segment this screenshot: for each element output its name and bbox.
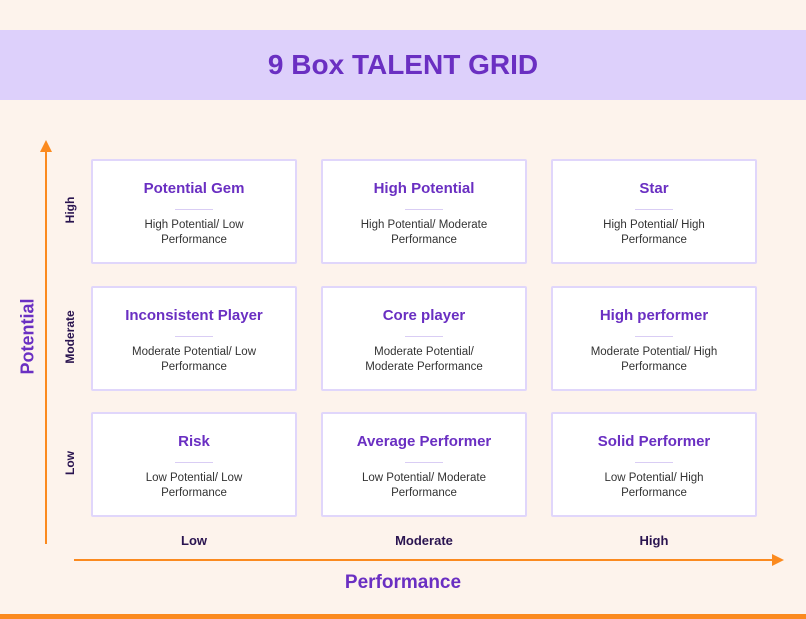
box: high performer: High performer [600,307,708,324]
box: high performer: Moderate Potential/ High Performance [591,346,717,373]
x label high: High [640,533,668,548]
box: potential gem: Potential Gem [144,180,244,197]
box: solid performer [551,412,757,517]
axis title: potential: Potential [18,298,38,375]
box: average performer: Low Potential/ Moderate Performance [362,472,486,499]
box: star [551,159,757,264]
y label moderate: Moderate [63,310,77,364]
box: star: High Potential/ High Performance [603,219,705,246]
box: average performer: Average Performer [357,433,491,450]
box: solid performer: Low Potential/ High Performance [604,472,704,499]
box: inconsistent player [91,286,297,391]
box: risk: Risk [178,433,210,450]
title: 9 Box TALENT GRID [268,49,538,80]
box: star: Star [639,180,669,197]
box: high performer [551,286,757,391]
box: potential gem: High Potential/ Low Performance [144,219,244,246]
arrow: potential axis [40,140,52,544]
box: inconsistent player: Moderate Potential/ Low Performance [132,346,256,373]
box: high potential [321,159,527,264]
box: high potential: High Potential/ Moderate Performance [361,219,487,246]
y label high: High [63,197,77,223]
arrow: performance axis [74,554,784,566]
x label moderate: Moderate [395,533,453,548]
box: solid performer: Solid Performer [598,433,710,450]
box: high potential: High Potential [374,180,474,197]
box: risk [91,412,297,517]
box: core player: Core player [383,307,465,324]
box: core player [321,286,527,391]
x label low: Low [181,533,207,548]
y label low: Low [63,451,77,475]
bottom bar [0,614,806,619]
axis title: performance: Performance [345,572,461,593]
box: core player: Moderate Potential/ Moderate Performance [365,346,483,373]
box: average performer [321,412,527,517]
box: inconsistent player: Inconsistent Player [125,307,263,324]
box: potential gem [91,159,297,264]
box: risk: Low Potential/ Low Performance [146,472,242,499]
header band [0,30,806,100]
